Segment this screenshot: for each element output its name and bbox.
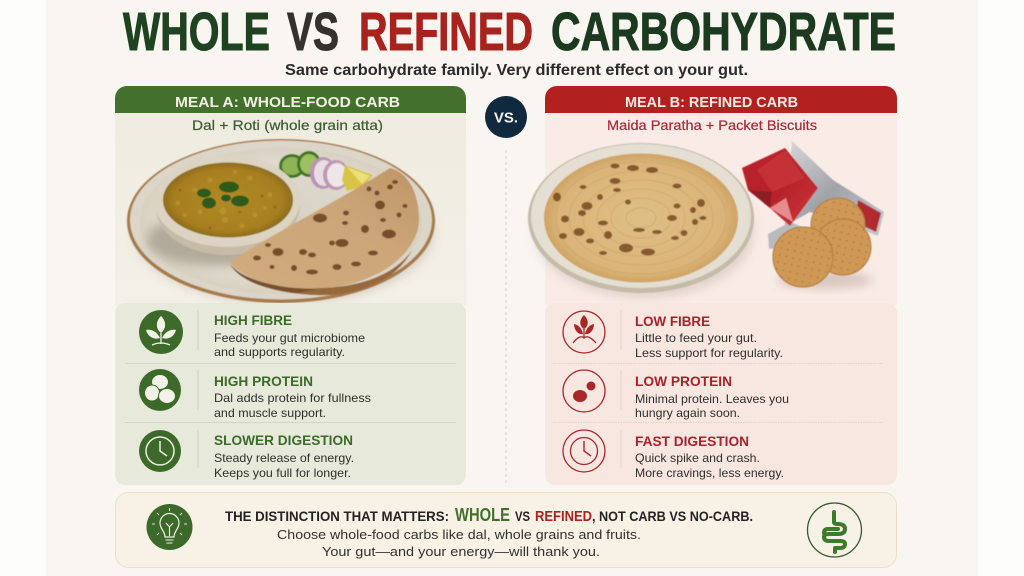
item: high protein: HIGH PROTEIN <box>214 374 313 389</box>
title: CARBOHYDRATE <box>551 2 896 62</box>
item: high protein: Dal adds protein for fullness <box>214 391 371 405</box>
VS badge: VS. <box>494 110 518 126</box>
meal A subtitle: Dal + Roti (whole grain atta) <box>192 117 383 133</box>
callout heading: REFINED <box>535 508 592 525</box>
folded roti <box>230 168 419 295</box>
item: slower digestion <box>214 433 354 480</box>
item: low fibre: LOW FIBRE <box>635 314 710 329</box>
icon: beans <box>139 369 181 411</box>
item: fast digestion: Quick spike and crash. <box>635 451 760 465</box>
panel: meal B <box>528 86 897 305</box>
panel: meal A <box>115 86 466 305</box>
meal B header <box>545 86 897 113</box>
meal B header: MEAL B: REFINED CARB <box>625 95 798 111</box>
item: high fibre: HIGH FIBRE <box>214 313 292 328</box>
title: REFINED <box>359 2 533 62</box>
meal A header <box>115 86 466 113</box>
icon: light bulb <box>146 504 192 550</box>
bowl of dal <box>147 155 300 266</box>
item: low protein <box>635 374 789 420</box>
meal A header: MEAL A: WHOLE-FOOD CARB <box>175 95 400 111</box>
item: low protein: Minimal protein. Leaves you <box>635 392 789 406</box>
meal B subtitle: Maida Paratha + Packet Biscuits <box>607 117 817 133</box>
icon: fast clock <box>563 430 605 472</box>
callout body: Your gut—and your energy—will thank you. <box>322 545 600 559</box>
illustration: biscuit packet <box>742 141 884 289</box>
item: high fibre: Feeds your gut microbiome <box>214 331 365 345</box>
callout body <box>277 528 641 559</box>
item: fast digestion <box>635 434 784 480</box>
item: low protein: LOW PROTEIN <box>635 374 732 389</box>
item: low fibre: Less support for regularity. <box>635 346 783 360</box>
subtitle: Same carbohydrate family. Very different effect on your gut. <box>285 62 748 79</box>
callout heading: THE DISTINCTION THAT MATTERS: <box>225 508 449 524</box>
cucumber, onion and lemon garnish <box>279 151 373 191</box>
icon: leaf sprout <box>139 310 183 354</box>
VS badge <box>485 96 527 138</box>
item: low protein: hungry again soon. <box>635 406 740 420</box>
callout: the distinction that matters <box>116 492 896 568</box>
icon: clock <box>139 430 181 472</box>
title: VS <box>287 2 339 62</box>
panel: meal B drawbacks <box>545 303 897 485</box>
title: WHOLE <box>123 2 270 62</box>
item: high protein <box>214 374 371 420</box>
illustration: dal and roti plate <box>127 139 435 304</box>
item: high protein: and muscle support. <box>214 406 326 420</box>
callout heading: WHOLE <box>455 505 510 525</box>
item: low fibre <box>635 314 783 360</box>
illustration: maida paratha plate <box>528 143 754 298</box>
item: fast digestion: FAST DIGESTION <box>635 434 749 449</box>
item: fast digestion: More cravings, less energy. <box>635 466 784 480</box>
icon: small beans <box>563 370 605 412</box>
VS divider line <box>505 150 507 484</box>
callout heading <box>225 505 753 525</box>
item: slower digestion: SLOWER DIGESTION <box>214 433 353 448</box>
panel: meal A benefits <box>115 303 466 485</box>
icon: gut <box>808 503 862 557</box>
item: slower digestion: Steady release of energy. <box>214 451 354 465</box>
item: low fibre: Little to feed your gut. <box>635 331 757 345</box>
callout heading: , NOT CARB VS NO-CARB. <box>592 508 753 524</box>
icon: weak sprout <box>563 311 605 353</box>
item: slower digestion: Keeps you full for longer. <box>214 466 351 480</box>
item: high fibre <box>214 313 365 359</box>
callout heading: VS <box>515 508 530 524</box>
callout body: Choose whole-food carbs like dal, whole grains and fruits. <box>277 528 641 542</box>
item: high fibre: and supports regularity. <box>214 345 345 359</box>
title <box>123 2 896 62</box>
